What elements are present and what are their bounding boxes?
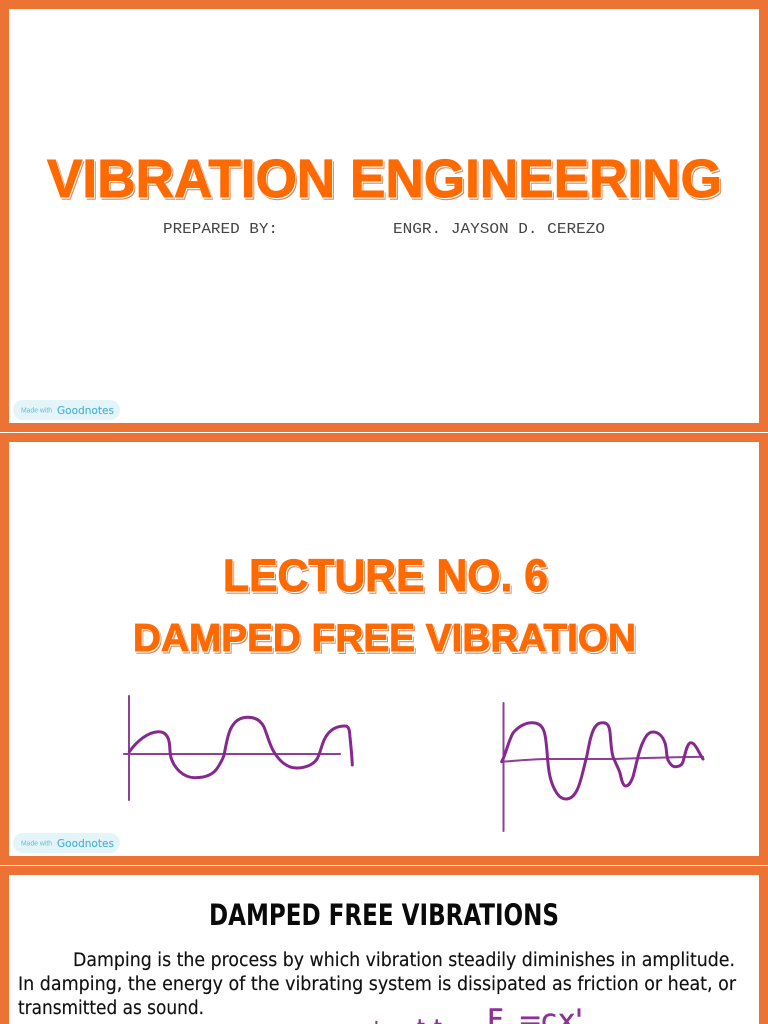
chart: damped vibration sketch — [502, 703, 703, 831]
lecture number heading: LECTURE NO. 6 — [223, 550, 548, 601]
badge: made with goodnotes: Goodnotes — [57, 404, 114, 417]
lecture number heading: LECTURE NO. 6 — [224, 551, 549, 602]
badge: made with goodnotes — [13, 400, 120, 420]
body paragraph — [18, 950, 736, 1019]
badge: made with goodnotes: Made with — [21, 408, 52, 414]
lecture subtitle: DAMPED FREE VIBRATION — [134, 619, 638, 662]
slide 2 frame — [0, 433, 768, 865]
section heading: DAMPED FREE VIBRATIONS — [209, 898, 559, 932]
lecture subtitle: DAMPED FREE VIBRATION — [134, 618, 637, 661]
panel: slide 3 — [0, 866, 768, 1024]
main title: VIBRATION ENGINEERING — [48, 150, 723, 210]
author name: ENGR. JAYSON D. CEREZO — [393, 222, 605, 238]
badge: made with goodnotes: Made with — [21, 840, 52, 848]
badge: made with goodnotes: Goodnotes — [57, 837, 114, 850]
chart: sustained vibration sketch — [124, 696, 352, 800]
slide 3 frame — [0, 866, 768, 1024]
prepared by label: PREPARED BY: — [163, 222, 278, 238]
main title: VIBRATION ENGINEERING — [47, 149, 722, 209]
panel: slide 2 — [0, 433, 768, 865]
body paragraph: transmitted as sound. — [18, 998, 204, 1019]
main title: VIBRATION ENGINEERING — [48, 151, 724, 211]
panel: slide 1 — [0, 0, 768, 432]
body paragraph: Damping is the process by which vibration steadily diminishes in amplitude. — [73, 950, 735, 971]
body paragraph: In damping, the energy of the vibrating system is dissipated as friction or heat, or — [18, 974, 736, 995]
lecture number heading: LECTURE NO. 6 — [224, 552, 550, 603]
slide 1 frame — [0, 0, 768, 432]
lecture subtitle: DAMPED FREE VIBRATION — [133, 617, 636, 660]
badge: made with goodnotes — [13, 833, 120, 853]
